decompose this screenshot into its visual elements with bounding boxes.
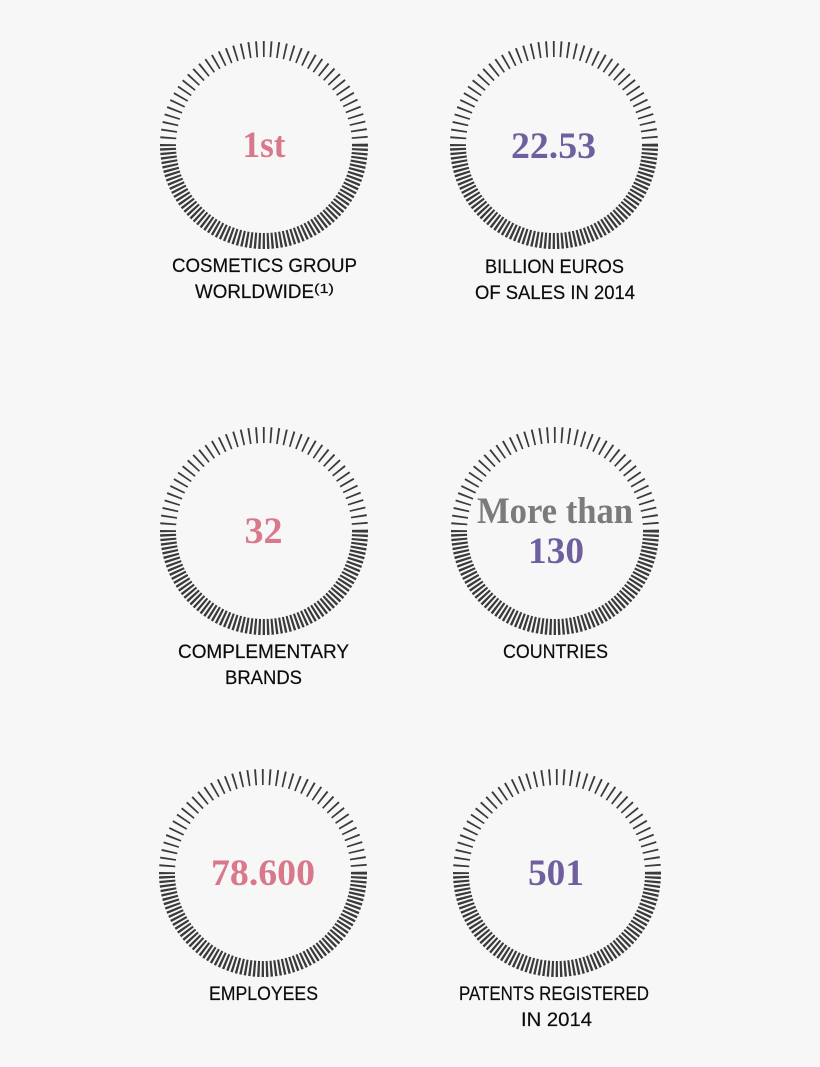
panel: sales [458, 49, 650, 304]
panel: countries [459, 435, 651, 663]
label: cosmetics group worldwide: WORLDWIDE [195, 281, 314, 303]
panel: brands [168, 435, 360, 689]
panel: cosmetics group [168, 49, 360, 303]
label: cosmetics group worldwide [172, 255, 357, 303]
ring gauge: employees [167, 777, 359, 969]
ring gauge: brands [168, 435, 360, 627]
label: billion euros of sales in 2014: OF SALES IN 2014 [475, 282, 635, 304]
ring gauge: patents [461, 777, 653, 969]
label: patents registered in 2014: IN 2014 [521, 1009, 592, 1031]
label: complementary brands: BRANDS [225, 667, 302, 689]
number: 22.53: 22.53 [511, 126, 596, 167]
label: cosmetics group worldwide: (1) [314, 281, 334, 296]
label: complementary brands [178, 641, 349, 689]
number: 501: 501 [528, 853, 584, 894]
panel: employees [167, 777, 359, 1005]
number: 78.600: 78.600 [211, 853, 315, 894]
label: billion euros of sales in 2014 [475, 256, 635, 304]
label: employees: EMPLOYEES [209, 983, 318, 1005]
ring gauge: sales [458, 49, 650, 241]
panel: patents [459, 777, 653, 1031]
label: patents registered in 2014 [459, 983, 649, 1031]
ring gauge: cosmetics group [168, 49, 360, 241]
label: cosmetics group worldwide: COSMETICS GROUP [172, 255, 357, 277]
label: billion euros of sales in 2014: BILLION EUROS [485, 256, 624, 278]
text: more than: More than [477, 491, 633, 532]
number: 1st: 1st [242, 125, 286, 166]
ring gauge: countries [459, 435, 651, 627]
label: patents registered in 2014: PATENTS REGISTERED [459, 983, 649, 1005]
number: 32: 32 [244, 511, 282, 552]
label: countries: COUNTRIES [503, 641, 608, 663]
label: complementary brands: COMPLEMENTARY [178, 641, 349, 663]
number: 130: 130 [528, 531, 584, 572]
